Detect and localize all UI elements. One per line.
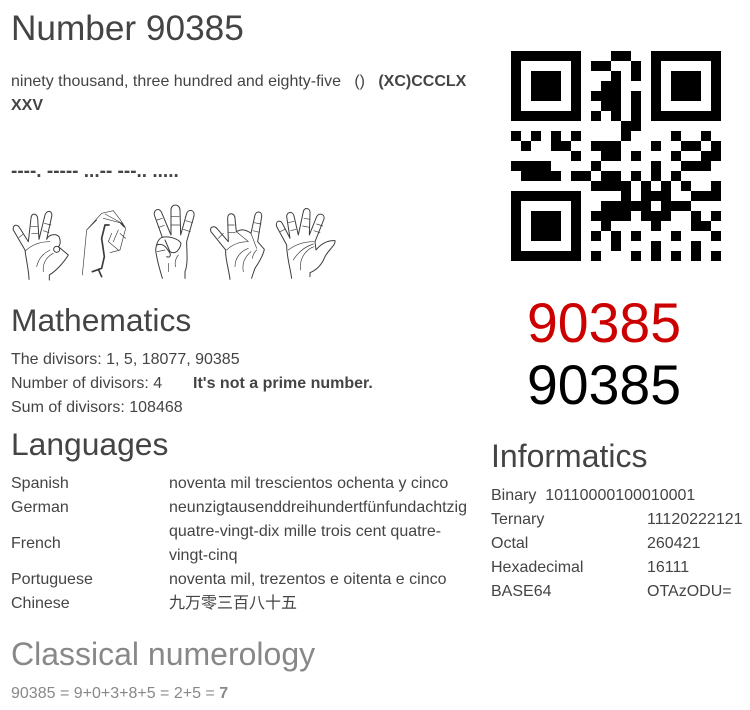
table: translations: vingt-cinq xyxy=(169,547,237,564)
table: translations: neunzigtausenddreihundertfünfundachtzig xyxy=(169,499,467,516)
table: number representations: BASE64 xyxy=(491,583,551,600)
text block: divisors xyxy=(11,351,373,416)
table: number representations: Binary 10110000100010001 xyxy=(491,487,695,504)
QR code xyxy=(511,51,721,261)
table: translations: Chinese xyxy=(11,595,70,612)
heading: Classical numerology: Classical numerology xyxy=(11,636,315,672)
large number: red: 90385 xyxy=(527,292,681,354)
large number: black: 90385 xyxy=(527,354,681,416)
text block: divisors: It's not a prime number. xyxy=(193,375,373,392)
table: number representations: 260421 xyxy=(647,535,700,552)
table: number representations: 11120222121 xyxy=(647,511,743,528)
text block: number in words and Roman numeral xyxy=(11,73,466,114)
text block: numerology sum: 90385 = 9+0+3+8+5 = 2+5 = 7 xyxy=(11,685,228,702)
icon: sign language hands xyxy=(12,204,336,280)
table: translations xyxy=(11,475,467,612)
table: translations: quatre-vingt-dix mille trois cent quatre- xyxy=(169,523,441,540)
table: number representations: Ternary xyxy=(491,511,544,528)
text block: divisors: The divisors: 1, 5, 18077, 90385 xyxy=(11,351,240,368)
title: Number 90385 xyxy=(11,9,244,48)
heading: Mathematics: Mathematics xyxy=(11,302,191,338)
text block: number in words and Roman numeral: ninety thousand, three hundred and eighty-five () (XC)CCCLX xyxy=(11,73,466,90)
table: number representations xyxy=(491,487,743,600)
table: number representations: 16111 xyxy=(647,559,689,576)
table: translations: French xyxy=(11,535,61,552)
table: number representations: Octal xyxy=(491,535,528,552)
table: translations: 九万零三百八十五 xyxy=(169,595,297,612)
text block: Morse code: ----. ----- ...-- ---.. ..... xyxy=(11,161,179,182)
heading: Informatics: Informatics xyxy=(491,438,647,474)
icon: hand 3 variant xyxy=(211,212,264,279)
table: translations: noventa mil, trezentos e oitenta e cinco xyxy=(169,571,446,588)
text block: divisors: Number of divisors: 4 xyxy=(11,375,162,392)
table: translations: German xyxy=(11,499,69,516)
icon: hand 5 xyxy=(276,209,335,278)
icon: hand 0 xyxy=(82,211,126,277)
text block: divisors: Sum of divisors: 108468 xyxy=(11,399,183,416)
table: number representations: Hexadecimal xyxy=(491,559,583,576)
text block: number in words and Roman numeral: XXV xyxy=(11,97,43,114)
icon: hand 3 xyxy=(154,205,194,278)
icon: hand 9 xyxy=(13,211,68,280)
table: number representations: OTAzODU= xyxy=(647,583,732,600)
heading: Languages: Languages xyxy=(11,426,168,462)
table: translations: noventa mil trescientos ochenta y cinco xyxy=(169,475,448,492)
table: translations: Portuguese xyxy=(11,571,93,588)
table: translations: Spanish xyxy=(11,475,69,492)
